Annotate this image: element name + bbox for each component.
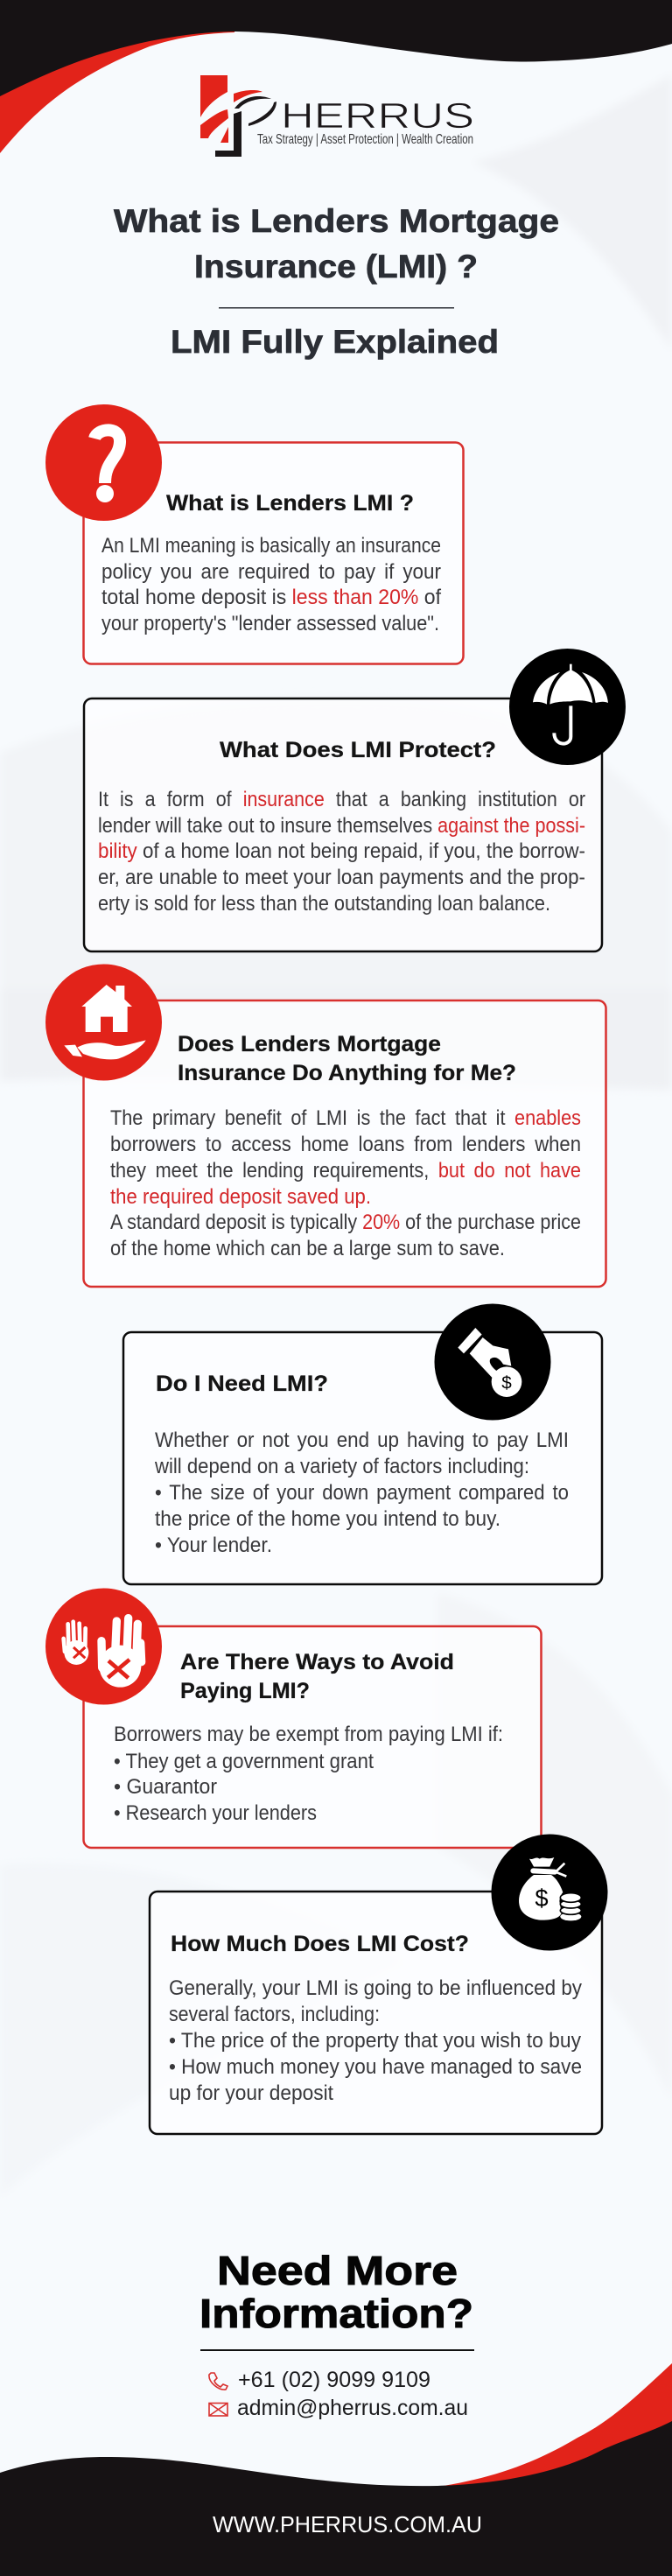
logo wordmark: HERRUS	[281, 95, 474, 136]
body text: Whether or not you end up having to pay LMI	[155, 1428, 569, 1452]
body text: It is a form of insurance that a banking institution or	[98, 788, 585, 811]
website url: WWW.PHERRUS.COM.AU	[213, 2511, 482, 2537]
body text: they meet the lending requirements, but do not have	[110, 1159, 581, 1183]
heading: What Does LMI Protect?	[220, 738, 496, 762]
panel: how much does LMI cost	[150, 1835, 607, 2134]
subtitle: LMI Fully Explained	[171, 324, 499, 360]
body text: of the home which can be a large sum to save.	[110, 1237, 505, 1260]
icon: hand dropping coin: $	[501, 1372, 512, 1393]
body text	[154, 1428, 569, 1557]
heading: Insurance Do Anything for Me?	[178, 1061, 516, 1085]
call to action heading: Information?	[200, 2291, 473, 2336]
body text: • How much money you have managed to save	[169, 2055, 582, 2079]
body text: Borrowers may be exempt from paying LMI if:	[114, 1723, 503, 1746]
body text: er, are unable to meet your loan payments and the prop-	[98, 866, 585, 889]
panel: what does LMI protect	[84, 649, 626, 951]
contact: email: admin@pherrus.com.au	[237, 2396, 468, 2420]
call to action heading: Need More	[217, 2248, 458, 2293]
icon: money bag	[492, 1835, 607, 1950]
icon: phone	[209, 2373, 228, 2390]
panel: what is lenders LMI	[46, 404, 464, 663]
call to action divider	[200, 2349, 474, 2351]
top wave: red swoosh	[0, 0, 234, 153]
body text: policy you are required to pay if your	[102, 560, 441, 584]
body text: Generally, your LMI is going to be influenced by	[169, 1976, 582, 2000]
body text: lender will take out to insure themselves against the possi-	[98, 814, 585, 838]
body text: several factors, including:	[169, 2003, 380, 2026]
body text: the price of the home you intend to buy.	[155, 1507, 500, 1531]
body text	[114, 1723, 503, 1825]
card frame	[84, 443, 464, 663]
body text: • Your lender.	[155, 1534, 272, 1557]
panel: do I need LMI	[123, 1304, 602, 1584]
panel: does LMI do anything for me	[46, 965, 606, 1287]
body text: will depend on a variety of factors including:	[154, 1455, 529, 1478]
body text	[98, 788, 585, 916]
body text: An LMI meaning is basically an insurance	[102, 534, 441, 558]
logo	[200, 75, 474, 157]
icon: envelope	[209, 2404, 228, 2416]
logo mark	[200, 75, 276, 157]
call to action heading	[200, 2248, 473, 2336]
body text: erty is sold for less than the outstanding loan balance.	[98, 892, 550, 916]
icon: stop hands	[46, 1588, 162, 1705]
body text: total home deposit is less than 20% of	[102, 586, 441, 609]
icon: hand dropping coin	[434, 1304, 551, 1420]
body text: • The size of your down payment compared to	[155, 1481, 569, 1505]
heading	[178, 1032, 516, 1085]
card frame	[84, 1000, 606, 1287]
body text: A standard deposit is typically 20% of the purchase price	[110, 1211, 581, 1234]
icon: money bag: $	[535, 1885, 549, 1912]
body text: your property's "lender assessed value".	[102, 612, 439, 635]
heading: Do I Need LMI?	[156, 1372, 328, 1396]
card frame	[123, 1332, 602, 1584]
title: What is Lenders Mortgage	[114, 203, 559, 239]
body text	[102, 534, 441, 635]
contact: phone: +61 (02) 9099 9109	[238, 2368, 430, 2392]
card frame	[150, 1892, 602, 2134]
top wave: black band	[0, 0, 672, 96]
heading	[180, 1650, 454, 1703]
heading: Are There Ways to Avoid	[180, 1650, 454, 1674]
title	[114, 203, 559, 284]
body text: • Guarantor	[114, 1775, 217, 1799]
body text	[110, 1106, 581, 1260]
body text: up for your deposit	[169, 2081, 333, 2105]
icon: question mark	[46, 404, 162, 521]
body text: • They get a government grant	[114, 1750, 374, 1773]
bottom wave: black band	[0, 2421, 672, 2576]
heading: Paying LMI?	[180, 1679, 310, 1703]
heading: What is Lenders LMI ?	[166, 491, 414, 516]
bottom wave: red swoosh	[438, 2363, 672, 2503]
body text: the required deposit saved up.	[110, 1185, 371, 1209]
body text	[169, 1976, 582, 2105]
panel: ways to avoid LMI	[46, 1588, 541, 1848]
title divider	[219, 307, 454, 308]
body text: bility of a home loan not being repaid, if you, the borrow-	[98, 839, 585, 863]
card frame	[84, 1626, 541, 1848]
heading: How Much Does LMI Cost?	[171, 1932, 469, 1956]
logo tagline: Tax Strategy | Asset Protection | Wealth Creation	[257, 132, 473, 147]
body text: The primary benefit of LMI is the fact that it enables	[110, 1106, 581, 1130]
body text: • The price of the property that you wish to buy	[169, 2029, 581, 2053]
icon: house in hand	[46, 965, 162, 1080]
card frame	[84, 698, 602, 951]
body text: • Research your lenders	[114, 1801, 317, 1825]
heading: Does Lenders Mortgage	[178, 1032, 441, 1056]
icon: umbrella	[509, 649, 626, 765]
body text: borrowers to access home loans from lenders when	[110, 1133, 581, 1156]
title: Insurance (LMI) ?	[194, 249, 478, 284]
